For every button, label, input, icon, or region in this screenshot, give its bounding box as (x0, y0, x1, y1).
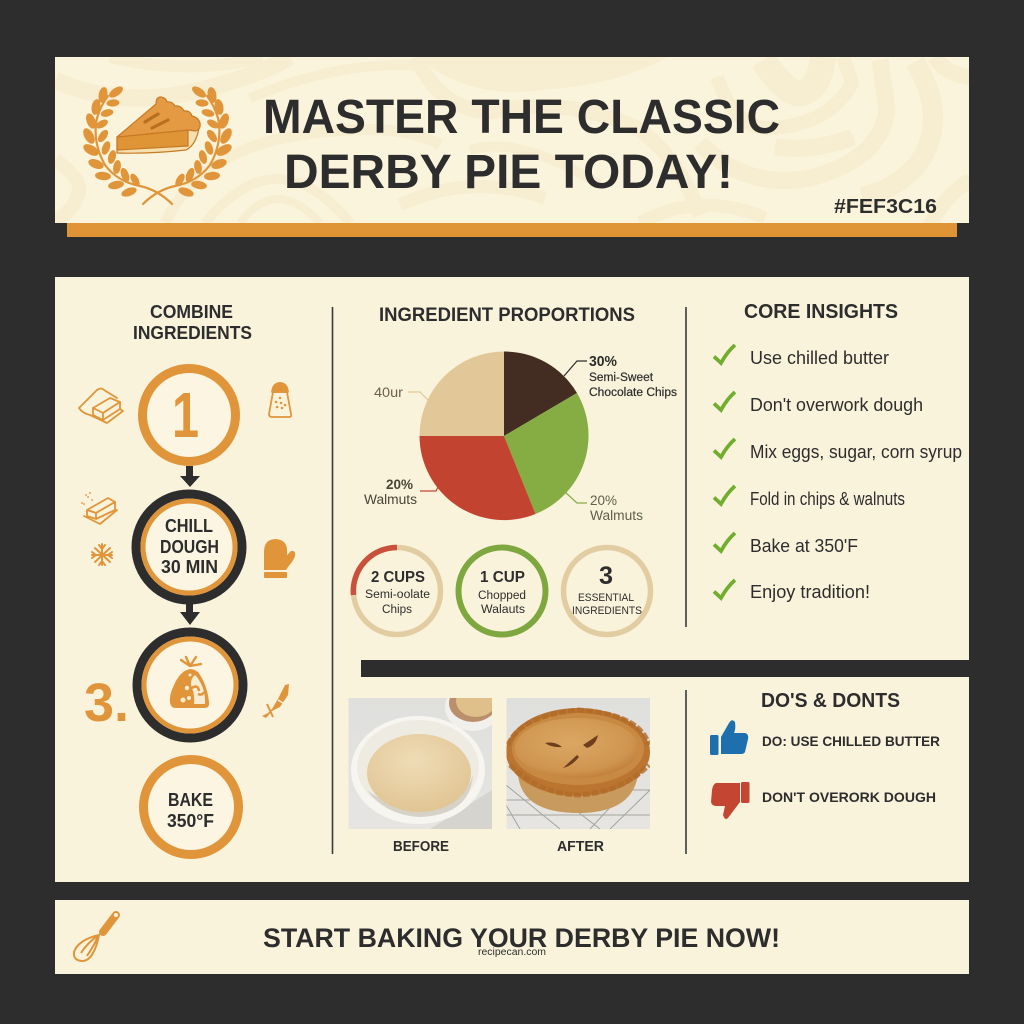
icon: oven mitt (264, 539, 295, 578)
after photo: baked pie on rack (506, 698, 650, 829)
icon: thumbs down (711, 782, 750, 819)
arrow 2 to 3 (180, 604, 200, 625)
title: DERBY PIE TODAY! (284, 146, 733, 199)
chart heading: INGREDIENT PROPORTIONS (379, 304, 635, 326)
label: chips 30%: Semi-Sweet (589, 372, 654, 384)
insight list: Mix eggs, sugar, corn syrup (750, 442, 962, 462)
gauge: 3 ingredients: 3 (599, 562, 613, 590)
icon: butter stick (82, 493, 117, 524)
icon: salt shaker (269, 383, 291, 417)
step 2 circle: 30 MIN (161, 557, 218, 577)
hex colour label: #FEF3C16 (834, 195, 937, 218)
icon: piping syringe (262, 684, 289, 718)
label: left walnuts: Walmuts (364, 492, 417, 507)
column dividers (332, 307, 686, 854)
gauge: 3 ingredients: ESSENTIAL (578, 592, 634, 604)
label: right walnuts (565, 492, 643, 523)
do's and don'ts (710, 690, 940, 819)
icon: butter and flour (79, 388, 123, 423)
step 2 circle (136, 494, 242, 600)
left laurel branch (81, 84, 172, 204)
label: left walnuts (364, 476, 438, 507)
label: left walnuts: 20% (386, 476, 414, 492)
icon: filling bag (170, 657, 209, 708)
column: pie chart (353, 304, 677, 634)
steps heading: INGREDIENTS (133, 323, 252, 343)
pie chart (420, 351, 589, 520)
before caption: BEFORE (393, 839, 449, 855)
step 1 circle (142, 368, 236, 462)
header banner (55, 57, 975, 237)
gauge: 3 ingredients: INGREDIENTS (572, 605, 642, 617)
gauge: 2 cups: 2 CUPS (371, 569, 425, 586)
pie slice (117, 97, 200, 153)
label: right walnuts: Walmuts (590, 508, 643, 523)
main panel (55, 277, 969, 882)
insight list: Fold in chips & walnuts (750, 489, 905, 509)
column: core insights (714, 301, 962, 602)
right laurel branch (143, 84, 234, 204)
insight list (750, 348, 962, 602)
step 3 number: 3. (84, 673, 129, 733)
gauge: 1 cup: Chopped (478, 590, 526, 602)
icon: whisk (74, 913, 118, 961)
step 3 circle (137, 632, 243, 738)
label: flour: 40ur (374, 384, 403, 400)
steps heading (133, 302, 252, 343)
don't text: DON'T OVERORK DOUGH (762, 789, 936, 805)
call to action: START BAKING YOUR DERBY PIE NOW! (263, 923, 780, 953)
title (263, 91, 780, 199)
gauge: 2 cups: Semi-oolate (365, 589, 430, 601)
insight list: Bake at 350'F (750, 536, 858, 556)
before photo: dough in bowl (348, 698, 492, 829)
insight list: Don't overwork dough (750, 395, 923, 415)
label: chips 30% (564, 354, 677, 399)
watermark: recipecan.com (478, 947, 546, 958)
gauge: 2 cups (353, 547, 440, 634)
do text: DO: USE CHILLED BUTTER (762, 733, 940, 749)
title: MASTER THE CLASSIC (263, 91, 780, 144)
gauge: 2 cups: Chips (382, 604, 412, 616)
label: chips 30%: 30% (589, 354, 617, 370)
gauge: 1 cup (458, 548, 546, 634)
gauge: 3 ingredients (564, 548, 650, 634)
step 1 circle: 1 (172, 379, 199, 451)
arrow 1 to 2 (180, 466, 200, 487)
step 4 circle: BAKE (168, 790, 213, 810)
insight check marks (714, 345, 735, 598)
label: flour (374, 384, 428, 400)
divider bar (361, 660, 969, 677)
icon: snowflake (92, 544, 112, 565)
label: chips 30%: Chocolate Chips (589, 387, 677, 399)
icon: thumbs up (710, 720, 748, 755)
insight list: Use chilled butter (750, 348, 889, 368)
label: right walnuts: 20% (590, 492, 617, 508)
insight list: Enjoy tradition! (750, 582, 870, 602)
insights heading: CORE INSIGHTS (744, 301, 898, 323)
icon: pie slice in laurel wreath (81, 84, 234, 204)
step 2 circle: CHILL (165, 516, 213, 536)
gauge: 1 cup: Walauts (481, 604, 525, 616)
header accent bar (67, 223, 957, 237)
steps heading: COMBINE (150, 302, 233, 322)
do's heading: DO'S & DONTS (761, 690, 900, 712)
after caption: AFTER (557, 839, 604, 855)
header panel with swirl pattern (55, 57, 975, 225)
step 2 circle: DOUGH (160, 537, 219, 557)
gauge: 1 cup: 1 CUP (480, 569, 525, 586)
footer banner (55, 900, 969, 974)
step 4 circle (144, 760, 238, 854)
column: steps (79, 302, 295, 854)
step 4 circle: 350°F (167, 811, 214, 831)
